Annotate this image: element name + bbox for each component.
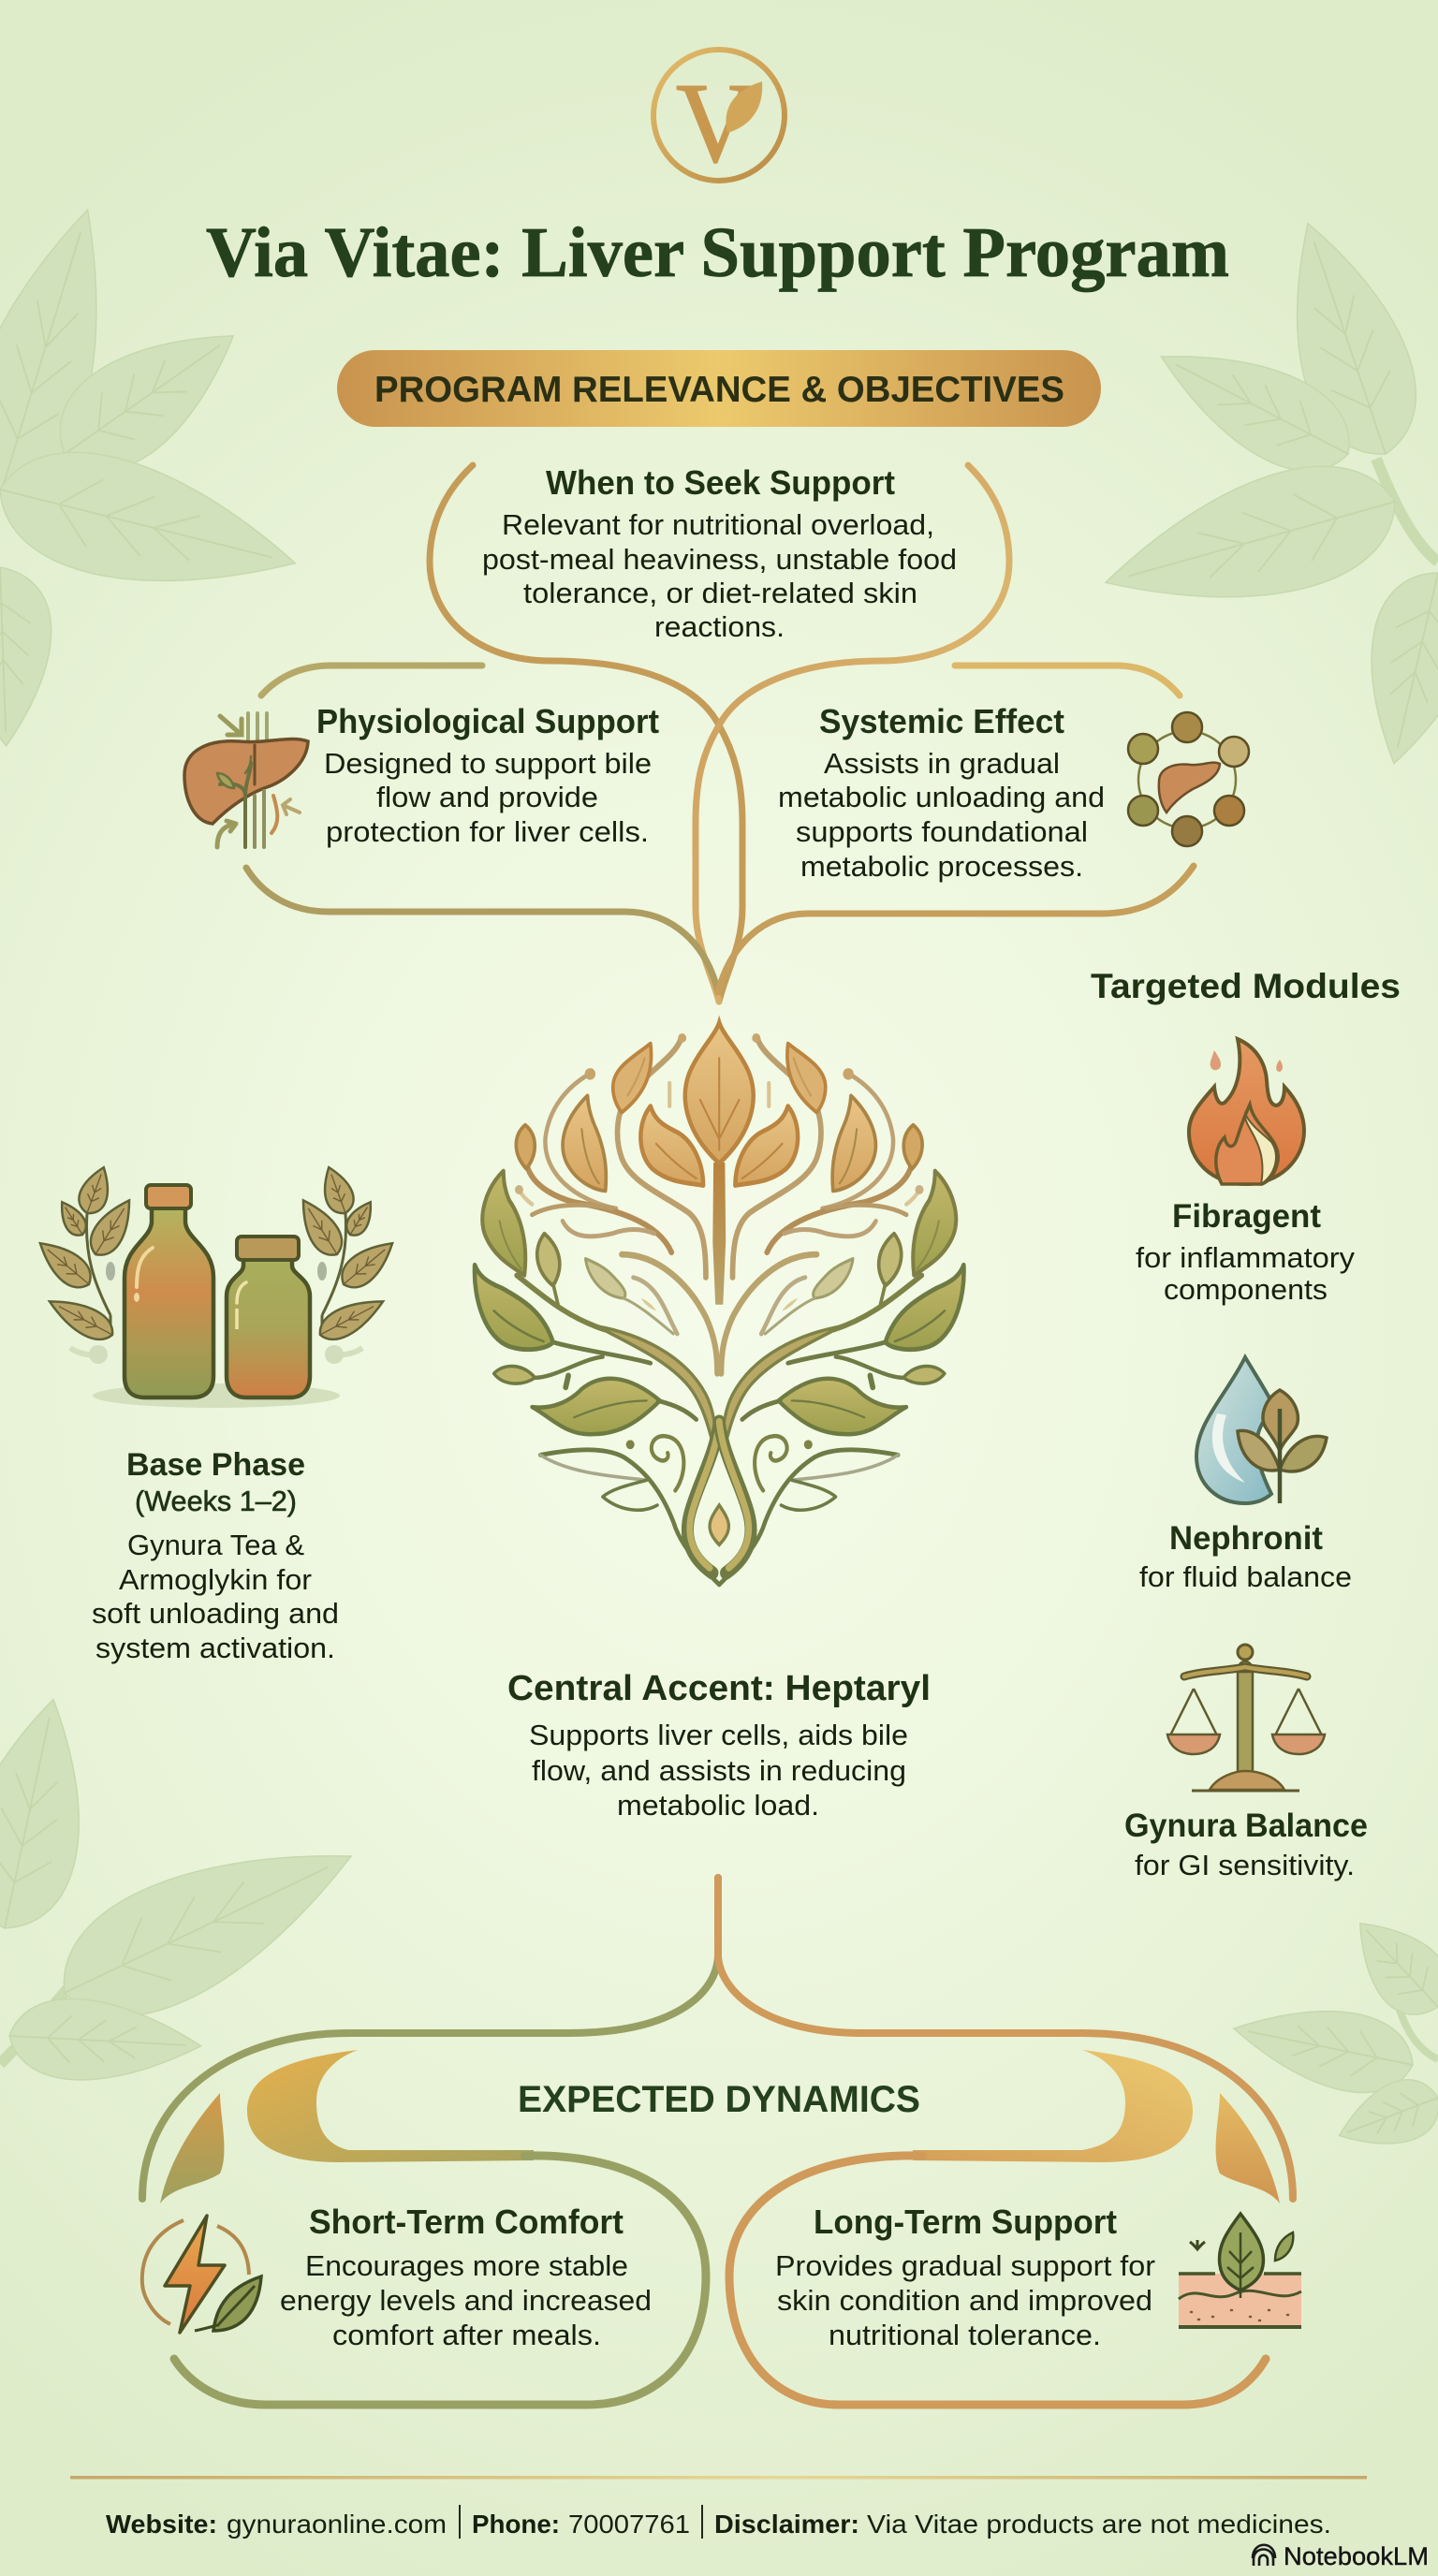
footer contact line: Via Vitae products are not medicines. (867, 2510, 1331, 2539)
text block: base phase: soft unloading and (92, 1597, 339, 1630)
text block: fibragent (1136, 1198, 1356, 1306)
text block: systemic effect: Systemic Effect (819, 702, 1064, 740)
decorative leaves bottom right (1226, 1900, 1438, 2164)
footer contact line: Disclaimer: (714, 2510, 859, 2539)
footer contact line: gynuraonline.com (227, 2510, 447, 2539)
footer contact line: 70007761 (568, 2510, 690, 2539)
icon: right sprig (291, 1163, 402, 1364)
text block: long-term support: skin condition and improved (777, 2284, 1152, 2317)
text block: short-term comfort (280, 2203, 652, 2351)
text block: when to seek support: tolerance, or diet-related skin (523, 577, 917, 609)
text block: base phase: Base Phase (126, 1447, 305, 1483)
text block: short-term comfort: energy levels and increased (280, 2284, 652, 2317)
text block: physiological support: flow and provide (376, 781, 598, 813)
text block: physiological support: protection for liver cells. (326, 815, 649, 848)
text block: fibragent: components (1164, 1273, 1328, 1306)
text block: when to seek support (482, 463, 957, 643)
text block: physiological support: Designed to support bile (324, 747, 652, 780)
banner: program relevance and objectives (337, 350, 1101, 427)
text block: central accent: Supports liver cells, aids bile (529, 1719, 908, 1751)
icon: small bottle (227, 1237, 310, 1398)
text block: nephronit (1139, 1520, 1352, 1593)
heading: targeted modules: Targeted Modules (1091, 967, 1401, 1005)
text block: gynura balance: Gynura Balance (1124, 1808, 1368, 1844)
footer contact line (106, 2505, 1331, 2539)
text block: short-term comfort: comfort after meals. (332, 2319, 601, 2351)
icon: tea bottles with leaves (31, 1163, 402, 1408)
text block: systemic effect: metabolic processes. (800, 850, 1083, 883)
text block: long-term support: Long-Term Support (814, 2203, 1117, 2241)
tree of life emblem (475, 1022, 964, 1585)
text block: physiological support (316, 702, 659, 848)
text block: long-term support: Provides gradual support for (775, 2249, 1155, 2282)
decorative leaves top right (1090, 206, 1438, 774)
icon: left sprig (31, 1163, 141, 1364)
text block: short-term comfort: Encourages more stable (305, 2249, 628, 2282)
banner: program relevance and objectives: PROGRAM RELEVANCE & OBJECTIVES (374, 370, 1064, 410)
text block: nephronit: Nephronit (1169, 1520, 1323, 1557)
text block: when to seek support: reactions. (654, 610, 785, 643)
text block: base phase: system activation. (95, 1632, 335, 1664)
text block: central accent: Central Accent: Heptaryl (507, 1669, 931, 1708)
text block: systemic effect (778, 702, 1105, 883)
logo: V (676, 60, 755, 186)
text block: when to seek support: post-meal heaviness, unstable food (482, 543, 957, 576)
text block: systemic effect: metabolic unloading and (778, 781, 1105, 813)
text block: nephronit: for fluid balance (1139, 1560, 1352, 1593)
text block: base phase: Gynura Tea & (127, 1529, 304, 1561)
icon: metabolic cycle (1128, 712, 1249, 846)
section frame: expected dynamics (160, 2050, 1280, 2405)
icon: balance scales (1167, 1645, 1325, 1791)
text block: central accent (507, 1669, 931, 1822)
text block: short-term comfort: Short-Term Comfort (309, 2203, 624, 2241)
text block: gynura balance (1124, 1808, 1368, 1881)
footer contact line: Phone: (472, 2510, 560, 2539)
notebooklm watermark: NotebookLM (1284, 2542, 1429, 2570)
footer divider (70, 2476, 1367, 2479)
text block: fibragent: for inflammatory (1136, 1241, 1356, 1274)
text block: when to seek support: When to Seek Support (546, 463, 895, 502)
text block: long-term support: nutritional tolerance. (829, 2319, 1101, 2351)
footer contact line: Website: (106, 2510, 217, 2539)
title: Via Vitae: Liver Support Program (206, 213, 1229, 292)
text block: central accent: metabolic load. (617, 1789, 819, 1822)
icon: flame (1189, 1039, 1304, 1184)
text block: long-term support (775, 2203, 1155, 2351)
icon: droplet with leaves (1196, 1357, 1327, 1503)
text block: systemic effect: supports foundational (796, 815, 1088, 848)
icon: sprout and skin layers (1179, 2214, 1301, 2327)
decorative leaves top left (0, 194, 310, 748)
icon: energy bolt with leaf (142, 2216, 261, 2333)
text block: base phase: Armoglykin for (119, 1563, 312, 1596)
logo (653, 50, 785, 186)
connector: central stem to dynamics (142, 1878, 1293, 2199)
text block: base phase (92, 1447, 339, 1664)
text block: physiological support: Physiological Support (316, 702, 659, 740)
text block: fibragent: Fibragent (1172, 1198, 1321, 1235)
icon: large bottle (125, 1185, 213, 1398)
decorative leaves bottom left (0, 1688, 376, 2086)
text block: systemic effect: Assists in gradual (824, 747, 1060, 780)
text block: gynura balance: for GI sensitivity. (1135, 1849, 1355, 1881)
connector curves: top section (246, 465, 1194, 1002)
text block: central accent: flow, and assists in reducing (532, 1754, 906, 1787)
text block: when to seek support: Relevant for nutritional overload, (502, 508, 934, 541)
heading: expected dynamics: EXPECTED DYNAMICS (518, 2079, 920, 2120)
text block: base phase: (Weeks 1–2) (135, 1485, 297, 1517)
icon: liver with bile ducts (184, 713, 308, 847)
